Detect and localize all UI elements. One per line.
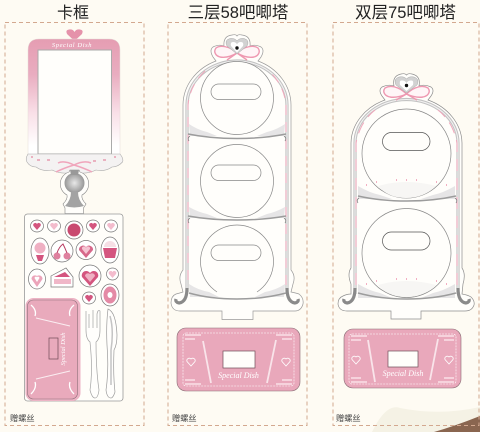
- pink base plate: [26, 298, 80, 401]
- panel: card frame outline: [5, 22, 144, 426]
- two-tier base plate: [344, 329, 461, 388]
- heading: three-tier tower: 三层58吧唧塔: [188, 3, 289, 22]
- metal ball stand: [60, 170, 89, 214]
- stand neck: [70, 170, 79, 175]
- plate window: [388, 351, 418, 367]
- plate fork and knife: [368, 339, 438, 382]
- tower silhouette: [338, 74, 474, 319]
- panel: three-tier tower outline: [168, 22, 307, 426]
- acrylic knife: [106, 309, 117, 398]
- heart center and hole: [400, 80, 413, 91]
- feet scrolls: [176, 288, 298, 303]
- sticker: cake: [51, 268, 73, 287]
- acrylic fork: [86, 310, 100, 398]
- shelf curls: [188, 136, 286, 223]
- sticker: big heart: [79, 265, 101, 287]
- plate hearts: [352, 356, 453, 364]
- shelves: [358, 196, 456, 299]
- plate corner lace: [351, 336, 454, 382]
- sticker: cherries: [51, 240, 73, 262]
- three-tier base plate: [177, 328, 300, 391]
- sticker: cupcake: [101, 237, 119, 263]
- frills: [189, 124, 285, 297]
- arch frame highlight: [355, 100, 458, 294]
- sheet outline: [24, 214, 123, 401]
- shelf curls: [357, 198, 457, 203]
- top heart: [395, 77, 418, 93]
- frame window: [38, 50, 112, 154]
- lace dots: [31, 157, 116, 161]
- background corner: paper and wood: [372, 407, 480, 432]
- frame body: [28, 39, 120, 158]
- plate title: Special Dish: [218, 371, 259, 380]
- arch frame gray: [187, 61, 287, 292]
- sticker: donut: [101, 284, 119, 306]
- sticker sheet: [24, 214, 123, 401]
- sticker: heart cookie: [76, 240, 96, 260]
- note: screws included, panel 1: 赠螺丝: [10, 413, 35, 423]
- stand foot: [65, 192, 84, 208]
- pink base plate: Special Dish: [60, 332, 67, 366]
- heart center and hole: [231, 42, 243, 52]
- pink bow: [215, 46, 259, 60]
- arch frame pink ribbon: [356, 110, 457, 285]
- tier 3 disc: [200, 225, 274, 292]
- stand ball: [64, 173, 84, 193]
- plate window: [223, 351, 255, 368]
- frame title: Special Dish: [52, 42, 92, 49]
- arch frame highlight: [187, 61, 287, 292]
- sticker: small pink heart: [106, 268, 118, 280]
- tier 2 disc: [362, 208, 451, 298]
- tier 1 disc: [362, 109, 451, 198]
- pink bow: [384, 86, 429, 100]
- tier 1 disc: [200, 62, 274, 134]
- three-tier tower: [171, 35, 303, 320]
- lace skirt: [26, 154, 123, 173]
- sticker: bear: [31, 238, 49, 264]
- two-tier tower: [338, 74, 474, 319]
- card frame with stand: [26, 29, 123, 213]
- note: screws included, panel 3: 赠螺丝: [336, 413, 361, 423]
- tier 2 disc: [200, 144, 274, 218]
- arch frame gray: [355, 100, 458, 294]
- pink bow: [56, 162, 92, 172]
- feet scrolls: [344, 288, 469, 303]
- sticker: small red heart: [82, 292, 96, 304]
- heading: card frame: 卡框: [57, 4, 89, 22]
- sticker: heart: [28, 269, 46, 289]
- plate fork and knife: [203, 340, 276, 383]
- frills: [358, 186, 455, 298]
- note: screws included, panel 2: 赠螺丝: [172, 413, 197, 423]
- plate title: Special Dish: [383, 369, 423, 378]
- shelves: [188, 134, 286, 299]
- sticker: small heart row: [30, 220, 118, 239]
- tower silhouette: [171, 35, 303, 320]
- panel: two-tier tower outline: [333, 22, 479, 426]
- plate corner lace: [185, 335, 292, 384]
- disc inner shading: [378, 182, 436, 297]
- pink dots on discs: [366, 180, 447, 284]
- top heart: [226, 38, 248, 54]
- frame heart tab: [66, 29, 83, 41]
- heading: two-tier tower: 双层75吧唧塔: [355, 3, 456, 22]
- arch frame pink ribbon: [188, 71, 286, 285]
- plate hearts: [187, 358, 290, 366]
